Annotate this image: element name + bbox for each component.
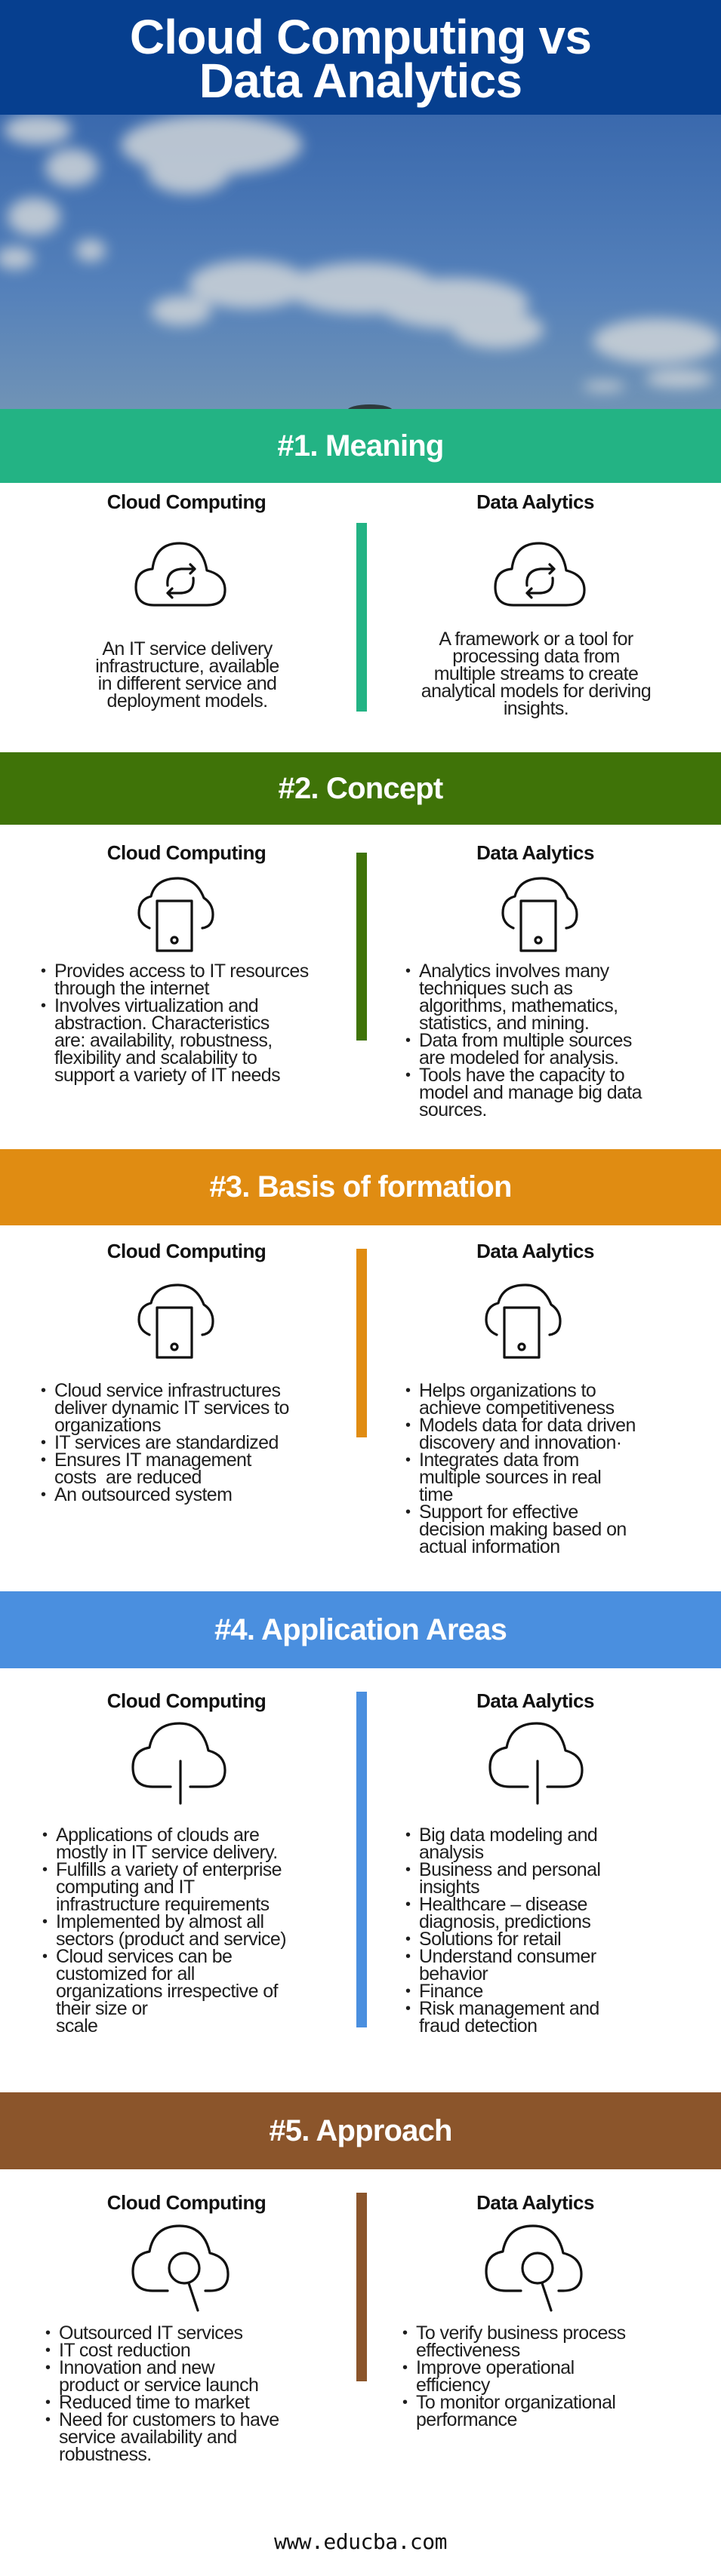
title banner: Data Analytics [199, 54, 522, 108]
list: concept data: Analytics involves many [419, 961, 609, 982]
list: application cloud: Fulfills a variety of enterprise [56, 1859, 282, 1880]
list: application data: Big data modeling and [419, 1824, 597, 1846]
list: application cloud: scale [56, 2015, 97, 2037]
list: basis data: discovery and innovation· [419, 1432, 622, 1453]
list: basis data: multiple sources in real [419, 1467, 601, 1488]
list: concept cloud: through the internet [54, 978, 209, 999]
section 5 header [0, 2092, 721, 2169]
list: application data: analysis [419, 1842, 484, 1863]
list: concept data: techniques such as [419, 978, 572, 999]
section 3 header [0, 1149, 721, 1225]
icon: cloud phone left 3 [137, 1283, 214, 1359]
list: basis cloud: Ensures IT management [54, 1449, 251, 1471]
list: basis data: achieve competitiveness [419, 1397, 615, 1419]
icon: cloud search right [485, 2224, 583, 2312]
list: application data: Business and personal [419, 1859, 600, 1880]
list: approach cloud: IT cost reduction [59, 2340, 190, 2361]
heading: cloud computing 2: Cloud Computing [107, 841, 266, 864]
list: concept data: statistics, and mining. [419, 1013, 589, 1034]
list: application cloud: organizations irrespective of [56, 1981, 278, 2002]
list: concept cloud [41, 961, 309, 1086]
list: basis data: actual information [419, 1536, 560, 1557]
section 1 header: #1. Meaning [277, 429, 444, 462]
list: application data: behavior [419, 1963, 488, 1984]
list: approach data: To monitor organizational [416, 2392, 615, 2413]
section 5 header: #5. Approach [269, 2114, 452, 2147]
list: application data: diagnosis, predictions [419, 1911, 590, 1932]
list: basis cloud: An outsourced system [54, 1484, 232, 1505]
list: concept data: algorithms, mathematics, [419, 995, 618, 1016]
list: basis cloud [41, 1380, 289, 1505]
list: approach data: To verify business process [416, 2322, 626, 2344]
list: concept cloud: Involves virtualization and [54, 995, 258, 1016]
list: application cloud: infrastructure requirements [56, 1894, 270, 1915]
text: meaning cloud [95, 638, 279, 712]
icon: cloud phone right [501, 877, 578, 952]
list: basis data: Support for effective [419, 1502, 578, 1523]
list: application data: Finance [419, 1981, 483, 2002]
list: concept data: are modeled for analysis. [419, 1047, 618, 1068]
title banner: Cloud Computing vs [130, 10, 591, 64]
list: concept data [406, 961, 642, 1120]
list: application data: Understand consumer [419, 1946, 596, 1967]
list: basis cloud: deliver dynamic IT services to [54, 1397, 289, 1419]
text: meaning data: processing data from [452, 646, 620, 667]
list: approach data: Improve operational [416, 2357, 575, 2378]
list: basis data: time [419, 1484, 453, 1505]
text: meaning data: analytical models for deriving [421, 681, 651, 702]
list: application cloud: computing and IT [56, 1877, 195, 1898]
list: application data: fraud detection [419, 2015, 537, 2037]
list: approach cloud [45, 2322, 279, 2465]
list: application cloud: Cloud services can be [56, 1946, 232, 1967]
list: basis cloud: IT services are standardized [54, 1432, 279, 1453]
icon: cloud search left [131, 2224, 230, 2312]
list: approach cloud: product or service launch [59, 2375, 258, 2396]
heading: data analytics 1: Data Aalytics [476, 490, 594, 513]
list: concept data: Tools have the capacity to [419, 1065, 624, 1086]
sky photo [0, 115, 721, 409]
list: approach cloud: Reduced time to market [59, 2392, 249, 2413]
icon: cloud sync left [134, 542, 226, 607]
text: meaning data: A framework or a tool for [439, 629, 633, 650]
list: approach data: efficiency [416, 2375, 490, 2396]
text: meaning cloud: An IT service delivery [102, 638, 273, 659]
list: application data: Healthcare – disease [419, 1894, 587, 1915]
list: application cloud: mostly in IT service delivery. [56, 1842, 278, 1863]
list: application cloud [42, 1824, 286, 2037]
text: meaning cloud: in different service and [98, 673, 276, 694]
title banner [0, 0, 721, 115]
list: basis cloud: costs are reduced [54, 1467, 202, 1488]
text: meaning data [421, 629, 651, 719]
list: basis data: Models data for data driven [419, 1415, 636, 1436]
list: approach cloud: service availability and [59, 2427, 237, 2448]
heading: cloud computing 1: Cloud Computing [107, 490, 266, 513]
heading: cloud computing 4: Cloud Computing [107, 1689, 266, 1712]
list: concept cloud: support a variety of IT needs [54, 1065, 280, 1086]
heading: data analytics 4: Data Aalytics [476, 1689, 594, 1712]
list: concept cloud: are: availability, robustness, [54, 1030, 273, 1051]
icon: cloud sync right [494, 542, 586, 607]
section 1 header [0, 409, 721, 483]
list: concept cloud: Provides access to IT resources [54, 961, 309, 982]
heading: data analytics 5: Data Aalytics [476, 2191, 594, 2214]
icon: cloud upload right [488, 1722, 584, 1805]
list: basis data: decision making based on [419, 1519, 627, 1540]
list: approach data: effectiveness [416, 2340, 520, 2361]
list: approach cloud: robustness. [59, 2444, 152, 2465]
list: concept data: Data from multiple sources [419, 1030, 632, 1051]
list: application cloud: their size or [56, 1998, 147, 2019]
list: concept data: sources. [419, 1099, 487, 1120]
text: meaning cloud: deployment models. [107, 690, 267, 712]
list: approach data: performance [416, 2409, 517, 2430]
heading: data analytics 2: Data Aalytics [476, 841, 594, 864]
icon: cloud phone left [137, 877, 214, 952]
list: approach cloud: Need for customers to have [59, 2409, 279, 2430]
list: approach cloud: Outsourced IT services [59, 2322, 242, 2344]
list: basis cloud: organizations [54, 1415, 161, 1436]
footer url: www.educba.com [274, 2529, 447, 2554]
list: application data: Risk management and [419, 1998, 599, 2019]
section 2 header: #2. Concept [279, 771, 442, 804]
list: concept data: model and manage big data [419, 1082, 642, 1103]
list: application cloud: Applications of clouds are [56, 1824, 259, 1846]
section 3 header: #3. Basis of formation [209, 1170, 512, 1203]
list: basis data [406, 1380, 636, 1557]
icon: cloud upload left [131, 1722, 226, 1805]
list: application data [406, 1824, 600, 2037]
list: concept cloud: flexibility and scalability to [54, 1047, 257, 1068]
list: concept cloud: abstraction. Characteristics [54, 1013, 270, 1034]
text: meaning data: multiple streams to create [434, 663, 638, 684]
heading: cloud computing 3: Cloud Computing [107, 1240, 266, 1262]
list: approach data [403, 2322, 626, 2430]
list: basis data: Integrates data from [419, 1449, 579, 1471]
list: application data: insights [419, 1877, 479, 1898]
list: application cloud: Implemented by almost all [56, 1911, 263, 1932]
list: application cloud: customized for all [56, 1963, 195, 1984]
section 4 header: #4. Application Areas [214, 1613, 507, 1646]
icon: cloud phone right 3 [485, 1283, 562, 1359]
list: basis cloud: Cloud service infrastructures [54, 1380, 280, 1401]
heading: cloud computing 5: Cloud Computing [107, 2191, 266, 2214]
section 4 header [0, 1591, 721, 1668]
text: meaning cloud: infrastructure, available [95, 656, 279, 677]
text: meaning data: insights. [504, 698, 568, 719]
list: approach cloud: Innovation and new [59, 2357, 214, 2378]
heading: data analytics 3: Data Aalytics [476, 1240, 594, 1262]
list: application cloud: sectors (product and service) [56, 1929, 286, 1950]
list: basis data: Helps organizations to [419, 1380, 596, 1401]
list: application data: Solutions for retail [419, 1929, 561, 1950]
section 2 header [0, 752, 721, 825]
